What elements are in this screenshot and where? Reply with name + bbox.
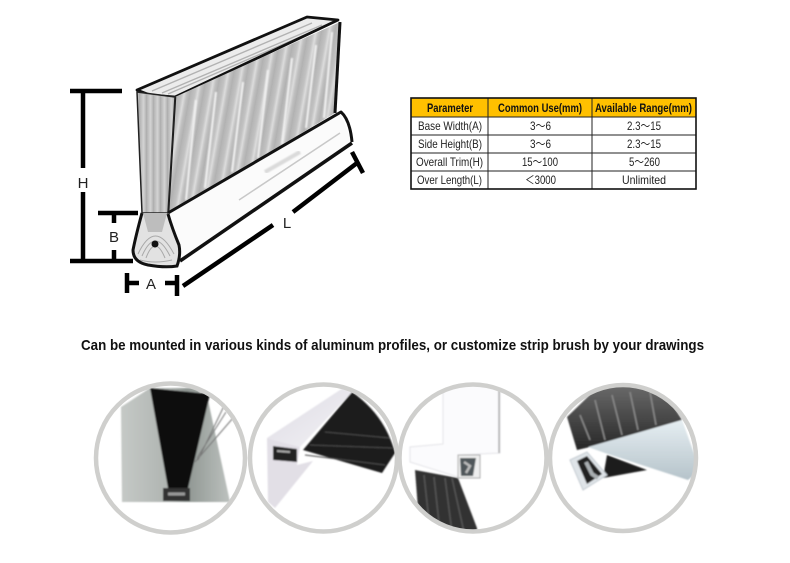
table text: 3～6 — [530, 119, 551, 133]
table text: Over Length(L) — [417, 173, 482, 187]
table text — [416, 101, 692, 187]
table text: Parameter — [427, 101, 473, 115]
table text: 2.3～15 — [627, 119, 661, 133]
aluminum base rail — [168, 112, 352, 261]
dimension H — [70, 91, 133, 261]
table text: Available Range(mm) — [595, 101, 692, 115]
brush side face — [137, 92, 175, 213]
photo circle 1: brush in floor profile — [96, 384, 245, 532]
base end cap — [133, 213, 180, 267]
photo circle 3: white door profile with brush — [400, 384, 546, 535]
table grid — [411, 98, 696, 189]
table text: 5～260 — [629, 155, 660, 169]
photo circle 4: aluminium channel with brush — [550, 385, 700, 531]
table text: Unlimited — [622, 173, 666, 187]
dimension H: H — [78, 175, 88, 192]
table text: ＜3000 — [525, 173, 556, 187]
parameter table — [411, 98, 696, 189]
strip brush diagram — [70, 17, 363, 296]
table text: Base Width(A) — [418, 119, 482, 133]
caption heading: Can be mounted in various kinds of aluminum profiles, or customize strip brush by your drawings — [81, 337, 704, 354]
table header row — [411, 98, 696, 117]
table text: Overall Trim(H) — [416, 155, 483, 169]
dimension L: L — [283, 215, 291, 232]
dimension B: B — [109, 229, 119, 246]
table text: Side Height(B) — [418, 137, 482, 151]
dimension B — [98, 213, 138, 261]
table text: 15～100 — [522, 155, 558, 169]
table outer border — [411, 98, 696, 189]
table text: Common Use(mm) — [498, 101, 582, 115]
dimension A: A — [146, 276, 156, 293]
brush top face — [137, 17, 338, 97]
table text: 3～6 — [530, 137, 551, 151]
photo circle 2: angled profile with brush — [250, 384, 397, 532]
dimension L — [183, 152, 363, 286]
brush front face — [168, 22, 340, 213]
dimension A — [127, 273, 177, 296]
table text: 2.3～15 — [627, 137, 661, 151]
